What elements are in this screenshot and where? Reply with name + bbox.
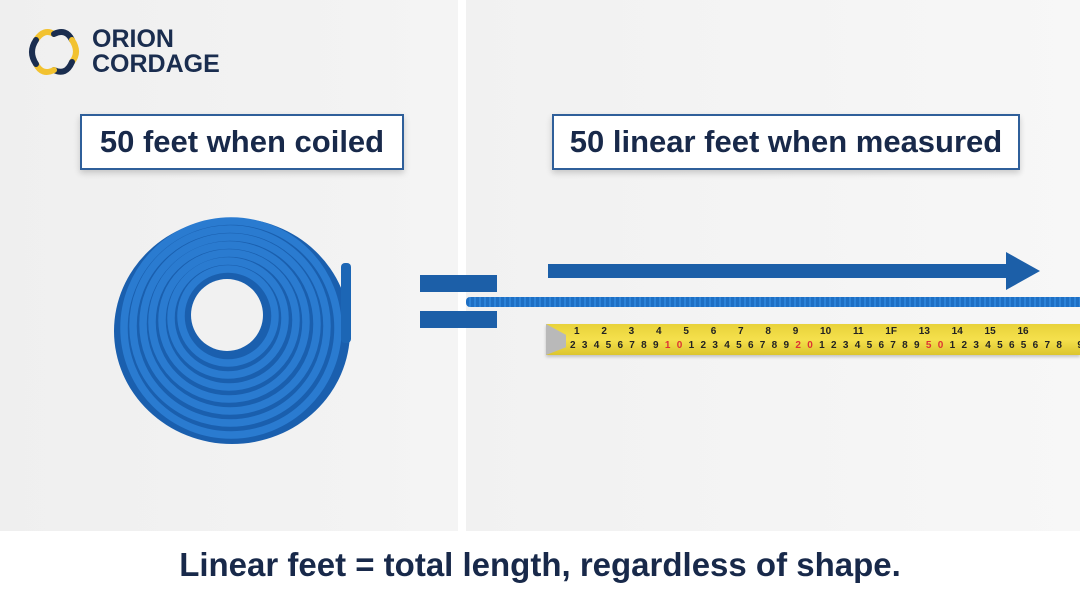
label: 50 linear feet when measured [552,114,1020,170]
coiled rope [114,217,351,444]
straight rope [466,297,1080,307]
label: 50 linear feet when measured: 50 linear feet when measured [570,124,1002,159]
logo: CORDAGE [92,50,220,78]
logo [28,25,220,78]
logo: ORION [92,25,174,53]
panel: left coiled [0,0,458,531]
caption: Linear feet = total length, regardless of shape. [179,546,901,583]
label: 50 feet when coiled: 50 feet when coiled [100,124,384,159]
tape measure [546,324,1080,355]
arrow [548,252,1040,290]
panel: right measured [466,0,1080,531]
tape measure: 1 2 3 4 5 6 7 8 9 10 11 1F 13 14 15 16 [574,326,1029,337]
label: 50 feet when coiled [80,114,404,170]
equals sign [420,275,497,328]
